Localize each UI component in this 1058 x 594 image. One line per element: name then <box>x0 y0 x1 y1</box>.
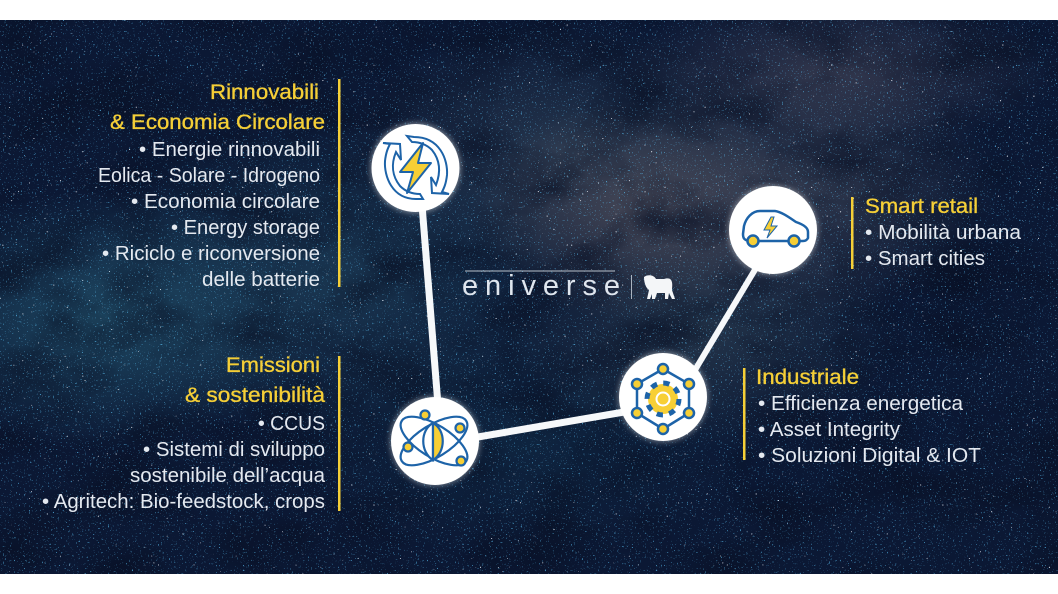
panel: industriale: • Soluzioni Digital & IOT <box>758 445 981 467</box>
panel: rinnovabili: Rinnovabili <box>210 81 319 104</box>
icon: recycling arrows with lightning bolt <box>383 136 449 199</box>
connector lines <box>422 205 756 438</box>
panel: rinnovabili: • Economia circolare <box>131 191 320 213</box>
node: emissions atom leaf <box>390 396 480 486</box>
panel: rinnovabili: • Energie rinnovabili <box>139 139 320 161</box>
panel: emissioni <box>42 354 340 513</box>
logo: eniverse: eniverse <box>462 270 620 302</box>
panel: smart retail: • Mobilità urbana <box>865 222 1022 244</box>
panel: emissioni: Emissioni <box>226 354 320 377</box>
panel: emissioni: • CCUS <box>258 413 325 435</box>
icon: atom with leaf <box>393 407 475 475</box>
panel: rinnovabili: • Riciclo e riconversione <box>102 243 320 265</box>
icon: six-legged dog logo <box>644 275 675 299</box>
panel: smart retail: Smart retail <box>865 195 978 218</box>
panel: emissioni: sostenibile dell’acqua <box>130 465 326 487</box>
icon: electric car <box>743 211 808 246</box>
panel: emissioni: & sostenibilità <box>185 384 325 407</box>
panel: industriale: • Asset Integrity <box>758 419 900 441</box>
node: industrial gear network <box>618 352 708 442</box>
panel: rinnovabili <box>98 79 340 291</box>
panel: smart retail <box>851 195 1022 270</box>
icon: gear with hexagon network <box>632 364 694 434</box>
panel: industriale <box>743 366 981 467</box>
panel: industriale: • Efficienza energetica <box>758 393 964 415</box>
panel: smart retail: • Smart cities <box>865 248 985 270</box>
panel: emissioni: • Sistemi di sviluppo <box>143 439 325 461</box>
panel: rinnovabili: Eolica - Solare - Idrogeno <box>98 165 320 187</box>
node: electric car <box>728 185 818 275</box>
panel: rinnovabili: & Economia Circolare <box>110 111 325 134</box>
panel: rinnovabili: • Energy storage <box>171 217 320 239</box>
panel: emissioni: • Agritech: Bio-feedstock, crops <box>42 491 325 513</box>
node: renewables <box>370 123 460 213</box>
panel: industriale: Industriale <box>756 366 859 389</box>
panel: rinnovabili: delle batterie <box>202 269 320 291</box>
